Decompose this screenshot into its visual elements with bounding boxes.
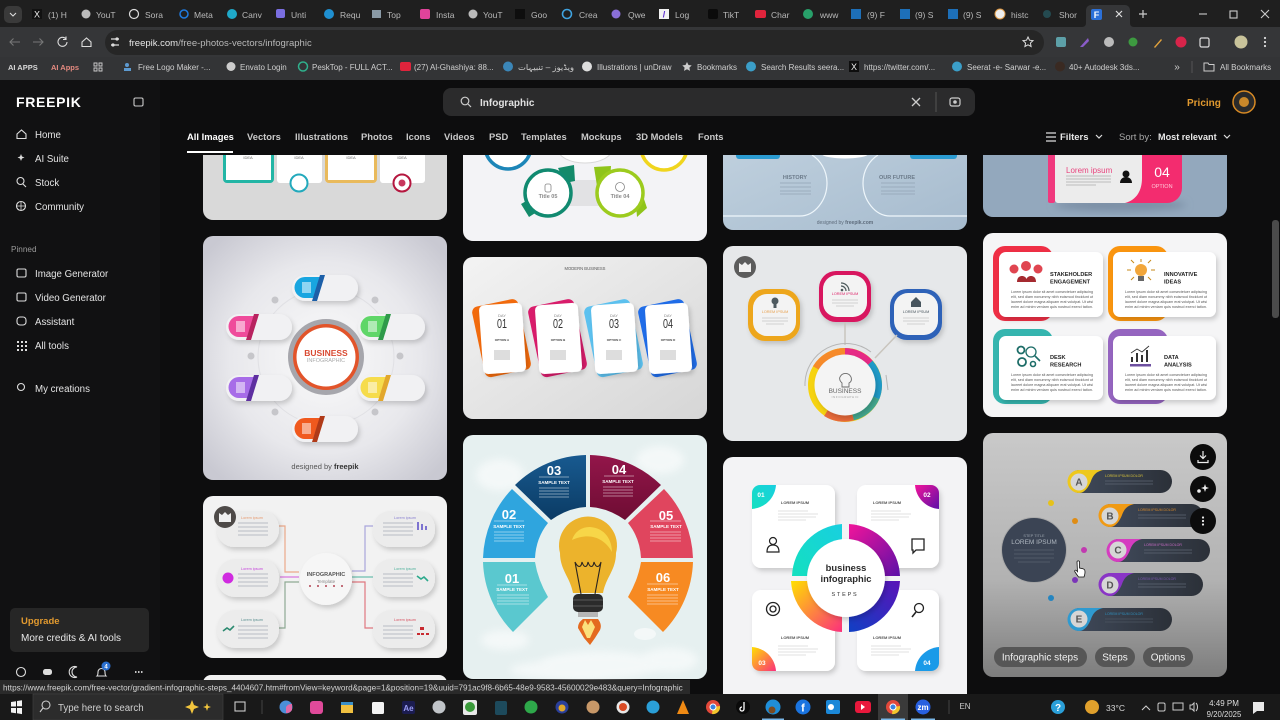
user avatar xyxy=(1233,91,1255,113)
category tabs: Icons xyxy=(406,131,430,142)
day card 01: OPTION A xyxy=(495,338,510,342)
card: modern business day cards xyxy=(463,257,707,419)
category tabs xyxy=(187,131,724,153)
topic: data analysis: ANALYSIS xyxy=(1164,362,1192,368)
center node: INFOGRAPHIC xyxy=(307,572,345,578)
tab strip: Insta xyxy=(436,10,455,20)
clouds xyxy=(476,446,698,679)
callout: blue: LOREM IPSUM xyxy=(903,310,929,314)
address bar xyxy=(105,30,1044,55)
menu: pinned tools: Video Generator xyxy=(35,293,107,304)
menu: main links: Community xyxy=(35,202,84,213)
tag: steps xyxy=(1095,647,1135,667)
active tab xyxy=(1082,5,1134,27)
center badge: BUSINESS xyxy=(304,348,348,358)
upgrade panel: Upgrade xyxy=(21,616,60,627)
category tabs: Mockups xyxy=(581,131,622,142)
tab strip: / xyxy=(663,10,666,20)
topic: desk research: laoreet dolore magna aliquam erat volutpat. Ut wisi xyxy=(1011,383,1093,387)
bookmarks bar: PeskTop - FULL ACT... xyxy=(312,63,393,72)
tag: infographic steps xyxy=(994,647,1087,667)
bookmarks bar xyxy=(0,57,1280,80)
category tabs: Photos xyxy=(361,131,393,142)
segment 01: SAMPLE TEXT xyxy=(496,587,528,592)
windows taskbar xyxy=(0,694,1280,720)
tab strip: Requ xyxy=(340,10,361,20)
clock xyxy=(1207,699,1242,719)
segment 03: 03 xyxy=(547,463,561,478)
pill: purple xyxy=(226,375,292,401)
category tabs: Fonts xyxy=(698,131,724,142)
pill: blue xyxy=(292,275,358,301)
center node: Template xyxy=(317,579,336,584)
topic: stakeholder engagement: enim ad minim veniam quis nostrud exerci tation. xyxy=(1011,305,1093,309)
tag: infographic steps: Infographic steps xyxy=(1002,652,1078,664)
pill: bottom right xyxy=(373,610,435,648)
business circle: I N F O G R A P H I C xyxy=(832,395,858,399)
tag: options: Options xyxy=(1151,652,1185,664)
tab strip: TikT xyxy=(723,10,739,20)
card: history and future (cropped): OUR FUTURE xyxy=(879,175,915,181)
topic: stakeholder engagement: elit, sed diam nonummy nibh euismod tincidunt ut xyxy=(1011,295,1093,299)
topic: stakeholder engagement: Lorem ipsum dolor sit amet consectetuer adipiscing xyxy=(1011,290,1093,294)
topic: desk research: Lorem ipsum dolor sit amet consectetuer adipiscing xyxy=(1011,373,1093,377)
tab strip: Qwe xyxy=(628,10,646,20)
upgrade panel: More credits & AI tools xyxy=(21,633,121,644)
menu: pinned tools: Image Generator xyxy=(35,269,109,280)
tab strip: (9) S xyxy=(915,10,934,20)
link status bar: https://www.freepik.com/free-vector/gradient-infographic-steps_4404607.htm#fromView=keyword&page=1&position=19&uuid=791ac9f8-6b65-48e9-9583-45600029e483&query=Infographic xyxy=(3,684,683,692)
icon: start button xyxy=(11,700,22,714)
segment 05: 05 xyxy=(659,508,673,523)
bookmarks bar: Free Logo Maker -... xyxy=(138,63,210,72)
segment 06: SAMPLE TEXT xyxy=(647,587,679,592)
footer icons xyxy=(16,662,142,677)
day card 01: 01 xyxy=(497,316,507,331)
icon: notifications xyxy=(1253,702,1264,714)
step bar A xyxy=(1068,470,1172,493)
taskbar search box: Type here to search xyxy=(58,703,144,714)
tab strip: www xyxy=(819,10,839,20)
day card 02: DAY xyxy=(554,313,562,318)
card: lorem ipsum option 04 (cropped): OPTION xyxy=(1151,184,1173,190)
topic: desk research: enim ad minim veniam quis nostrud exerci tation. xyxy=(1011,388,1093,392)
results scrollbar xyxy=(1272,220,1279,318)
segment 03: SAMPLE TEXT xyxy=(538,480,570,485)
column 2 image cards xyxy=(463,120,707,679)
bookmarks bar: » xyxy=(1174,62,1180,73)
segment 04: SAMPLE TEXT xyxy=(602,479,634,484)
tab strip: Char xyxy=(771,10,790,20)
browser chrome xyxy=(0,0,1280,80)
topic: desk research: elit, sed diam nonummy nibh euismod tincidunt ut xyxy=(1011,378,1093,382)
footer icons: 4 xyxy=(104,664,108,670)
segment 02 xyxy=(483,489,548,558)
app icons: f xyxy=(801,702,805,714)
category tabs: 3D Models xyxy=(636,131,683,142)
bookmarks bar: ویڈیوز – تنبیہات xyxy=(518,63,574,72)
center ring: business xyxy=(826,562,866,573)
center ring: STEPS xyxy=(831,592,859,598)
card: business infographic hexagon pills: designed by freepik xyxy=(291,462,359,471)
segment 06: 06 xyxy=(656,570,670,585)
step bar D: D xyxy=(1106,580,1114,592)
topic: data analysis: laoreet dolore magna aliquam erat volutpat. Ut wisi xyxy=(1125,383,1207,387)
topic: data analysis: elit, sed diam nonummy nibh euismod tincidunt ut xyxy=(1125,378,1207,382)
step card 03: LOREM IPSUM xyxy=(781,635,810,640)
tab strip: (1) H xyxy=(48,10,67,20)
topic: stakeholder engagement: laoreet dolore magna aliquam erat volutpat. Ut wisi xyxy=(1011,300,1093,304)
topic: desk research: DESK xyxy=(1050,355,1066,361)
card: four business topics xyxy=(983,233,1227,417)
step card 02 xyxy=(857,485,939,568)
topic: innovative ideas: elit, sed diam nonummy nibh euismod tincidunt ut xyxy=(1125,295,1207,299)
step card 01: 01 xyxy=(757,492,765,499)
topic: innovative ideas: IDEAS xyxy=(1164,280,1181,286)
bookmarks bar: All Bookmarks xyxy=(1220,63,1271,72)
step card 03 xyxy=(752,590,835,671)
action button: more xyxy=(1190,508,1216,534)
segment 01 xyxy=(483,562,548,632)
filters and sort: Sort by: xyxy=(1119,132,1152,143)
menu: main links: Stock xyxy=(35,178,59,189)
bookmarks bar: Illustrations | unDraw xyxy=(597,63,672,72)
connector dots xyxy=(1048,500,1087,601)
bookmarks bar: X xyxy=(851,62,857,72)
card: business infographic four steps xyxy=(723,457,967,707)
pill: bottom left xyxy=(217,610,279,648)
system tray xyxy=(1051,700,1198,714)
Freepik logo: FREEPIK xyxy=(16,94,82,110)
step bar E: E xyxy=(1076,614,1083,626)
clock: 9/20/2025 xyxy=(1207,710,1242,719)
tab strip: Log xyxy=(675,10,689,20)
pill: bottom right: Lorem ipsum xyxy=(394,618,416,622)
action button: download xyxy=(1190,444,1216,470)
icon: hand cursor xyxy=(1075,561,1085,577)
tab strip: (9) S xyxy=(963,10,982,20)
day card 04: OPTION D xyxy=(661,338,676,342)
app icons xyxy=(235,694,949,720)
heading: pinned: Pinned xyxy=(11,245,37,254)
language indicator: EN xyxy=(959,702,971,711)
app icons: zm xyxy=(917,703,929,712)
category tabs: Videos xyxy=(444,131,475,142)
day card 01 xyxy=(471,298,532,378)
clock: 4:49 PM xyxy=(1209,699,1239,708)
topic: innovative ideas: Lorem ipsum dolor sit amet consectetuer adipiscing xyxy=(1125,290,1207,294)
card: idea boxes (cropped) xyxy=(203,130,447,220)
filters and sort xyxy=(1046,132,1230,143)
card: lorem ipsum option 04 (cropped) xyxy=(983,120,1227,217)
filters and sort: Filters xyxy=(1060,132,1089,143)
card: history and future (cropped) xyxy=(723,120,967,230)
tab strip: YouT xyxy=(483,10,503,20)
pricing link: Pricing xyxy=(1187,98,1221,109)
step card 01: LOREM IPSUM xyxy=(781,500,810,505)
menu: pinned tools: All tools xyxy=(35,341,69,352)
menu: main links: AI Suite xyxy=(35,154,69,165)
bookmarks bar: (27) Al-Ghashiya: 88... xyxy=(414,63,494,72)
pill: middle right xyxy=(373,559,435,597)
pill: top left xyxy=(217,511,279,547)
pill: bottom left: Lorem ipsum xyxy=(241,618,263,622)
step bar A: LOREM IPSUM DOLOR xyxy=(1105,474,1143,478)
day card 02 xyxy=(527,298,588,378)
topic: innovative ideas xyxy=(1108,246,1216,321)
segment 05 xyxy=(628,489,693,558)
step bar C: LOREM IPSUM DOLOR xyxy=(1144,543,1182,547)
card: history and future (cropped): designed by freepik.com xyxy=(817,220,874,226)
tab strip: Crea xyxy=(579,10,598,20)
menu: pinned tools: Assistant xyxy=(35,317,75,328)
card: title circles (cropped): Title 04 xyxy=(611,194,630,200)
card: lorem ipsum option 04 (cropped): 04 xyxy=(1154,164,1170,180)
center ring xyxy=(791,524,900,632)
segment 02: SAMPLE TEXT xyxy=(493,524,525,529)
system tray: ? xyxy=(1055,703,1061,714)
card: modern business day cards: MODERN BUSINESS xyxy=(565,266,606,271)
tab strip: histc xyxy=(1011,10,1029,20)
tag: steps: Steps xyxy=(1102,652,1128,664)
callout: crimson xyxy=(819,271,871,322)
pill: top right xyxy=(373,511,435,547)
day card 03: OPTION C xyxy=(607,338,622,342)
step bar B xyxy=(1098,504,1203,527)
column 1 image cards xyxy=(203,130,447,715)
icon: light bulb with rocket flame xyxy=(559,516,617,645)
category tabs: PSD xyxy=(489,131,509,142)
category tabs: Illustrations xyxy=(295,131,348,142)
step card 02: LOREM IPSUM xyxy=(873,500,902,505)
address bar: freepik.com/free-photos-vectors/infographic xyxy=(129,38,312,49)
callout: amber xyxy=(748,289,800,341)
center node xyxy=(300,553,352,605)
search box xyxy=(443,88,975,116)
card: business circle with three rounded callouts xyxy=(723,246,967,441)
topic: stakeholder engagement xyxy=(993,246,1103,321)
topic: data analysis: DATA xyxy=(1164,355,1179,361)
pill: top left: Lorem ipsum xyxy=(241,516,263,520)
tab strip: Goo xyxy=(531,10,547,20)
segment 03 xyxy=(515,455,586,520)
card: lorem ipsum option 04 (cropped): Lorem ipsum xyxy=(1066,166,1113,175)
step card 03: 03 xyxy=(758,660,766,667)
card: idea boxes (cropped): IDEA xyxy=(243,155,253,160)
active tab: F xyxy=(1094,10,1100,20)
bookmarks bar: Envato Login xyxy=(240,63,287,72)
card: next row (cropped) xyxy=(203,675,447,715)
card: idea boxes (cropped): IDEA xyxy=(346,155,356,160)
tab strip xyxy=(0,0,1280,27)
category tabs: Templates xyxy=(521,131,567,142)
premium badge xyxy=(734,256,756,278)
business circle: BUSINESS xyxy=(829,388,862,395)
card: business infographic hexagon pills xyxy=(203,236,447,480)
segment 06 xyxy=(628,562,693,632)
day card 01: DAY xyxy=(498,313,506,318)
step bar A: A xyxy=(1075,478,1083,488)
day card 04: 04 xyxy=(663,316,673,331)
action button: sparkle xyxy=(1190,476,1216,502)
menu: pinned tools: My creations xyxy=(35,384,90,395)
card: infographic template mind map xyxy=(203,496,447,658)
pill: yellow xyxy=(358,375,425,401)
day card 04: DAY xyxy=(664,313,672,318)
card: light bulb rocket fan xyxy=(463,435,707,679)
bookmarks bar: Bookmarks xyxy=(697,63,737,72)
card: hovered infographic steps xyxy=(983,433,1227,677)
system tray: 33°C xyxy=(1106,703,1125,713)
bookmarks bar: Search Results seera... xyxy=(761,63,844,72)
segment 01: 01 xyxy=(505,571,519,586)
step card 01 xyxy=(752,485,835,568)
step bar D: LOREM IPSUM DOLOR xyxy=(1138,577,1176,581)
site sidebar xyxy=(0,80,160,694)
pill: middle right: Lorem ipsum xyxy=(394,567,416,571)
card: idea boxes (cropped): IDEA xyxy=(397,155,407,160)
tab strip: X xyxy=(34,10,40,20)
dark lorem ipsum circle xyxy=(1001,517,1067,583)
dark lorem ipsum circle: LOREM IPSUM xyxy=(1011,539,1057,546)
pill: orange xyxy=(292,416,358,442)
menu: main links: Home xyxy=(35,130,61,141)
column 3 image cards xyxy=(723,120,967,707)
card: history and future (cropped): HISTORY xyxy=(783,175,807,181)
day card 03: 03 xyxy=(609,316,619,331)
bookmarks bar: AI APPS xyxy=(8,63,38,72)
category tabs: Vectors xyxy=(247,131,281,142)
tab strip: (9) F xyxy=(867,10,885,20)
bookmarks bar: Seerat -e- Sarwar -e... xyxy=(967,63,1046,72)
step card 04: 04 xyxy=(923,660,931,667)
icon: sidebar toggle xyxy=(134,98,143,106)
day card 02: 02 xyxy=(553,316,563,331)
card: title circles (cropped) xyxy=(463,120,707,241)
segment 04: 04 xyxy=(612,462,627,477)
topic: desk research xyxy=(993,329,1103,404)
day card 04 xyxy=(637,298,698,378)
center badge: INFOGRAPHIC xyxy=(307,358,345,364)
step bar E xyxy=(1068,608,1172,631)
menu: pinned tools xyxy=(17,269,109,395)
pill: middle left: Lorem ipsum xyxy=(241,567,263,571)
extension icons xyxy=(1056,36,1266,48)
premium badge xyxy=(214,506,236,528)
bookmarks bar: https://twitter.com/... xyxy=(864,63,935,72)
tab strip: Unti xyxy=(291,10,306,20)
day card 03: DAY xyxy=(610,313,618,318)
day card 03 xyxy=(583,298,644,378)
upgrade panel xyxy=(10,608,149,652)
bookmarks bar: 40+ Autodesk 3ds... xyxy=(1069,63,1140,72)
pill: green xyxy=(358,314,425,340)
app icons: Ae xyxy=(403,704,414,713)
tab strip: YouT xyxy=(96,10,116,20)
dark lorem ipsum circle: STEP TITLE xyxy=(1023,534,1045,538)
tab strip: Sora xyxy=(145,10,163,20)
segment 04 xyxy=(590,455,661,520)
center badge xyxy=(288,319,364,395)
topic: data analysis: enim ad minim veniam quis nostrud exerci tation. xyxy=(1125,388,1207,392)
topic: data analysis xyxy=(1108,329,1216,404)
card: idea boxes (cropped): IDEA xyxy=(294,155,304,160)
menu: main links xyxy=(16,130,84,213)
filters and sort: Most relevant xyxy=(1158,132,1217,142)
link status bar xyxy=(0,680,690,694)
callout: amber: LOREM IPSUM xyxy=(762,310,788,314)
topic: data analysis: Lorem ipsum dolor sit amet consectetuer adipiscing xyxy=(1125,373,1207,377)
step card 02: 02 xyxy=(923,492,931,499)
card: title circles (cropped): Title 05 xyxy=(539,194,557,200)
step bar C xyxy=(1106,539,1210,562)
tab strip: Shor xyxy=(1059,10,1077,20)
topic: innovative ideas: enim ad minim veniam quis nostrud exerci tation. xyxy=(1125,305,1207,309)
window controls xyxy=(1139,10,1269,18)
pill: top right: Lorem ipsum xyxy=(394,516,416,520)
tag: options xyxy=(1143,647,1193,667)
pill: pink xyxy=(226,314,292,340)
step card 04 xyxy=(857,590,939,671)
pill: middle left xyxy=(217,559,279,597)
topic: desk research: RESEARCH xyxy=(1050,362,1081,368)
address toolbar xyxy=(0,27,1280,57)
center ring: infographic xyxy=(820,573,872,584)
column 4 image cards xyxy=(983,120,1227,677)
step bar B: LOREM IPSUM DOLOR xyxy=(1138,508,1176,512)
segment 02: 02 xyxy=(502,507,516,522)
day card 02: OPTION B xyxy=(551,338,566,342)
topic: innovative ideas: INNOVATIVE xyxy=(1164,272,1198,278)
topic: stakeholder engagement: STAKEHOLDER xyxy=(1050,272,1092,278)
taskbar search box xyxy=(33,694,223,720)
segment 05: SAMPLE TEXT xyxy=(650,524,682,529)
callout: blue xyxy=(890,289,942,340)
callout: crimson: LOREM IPSUM xyxy=(832,292,858,296)
category tabs: All Images xyxy=(187,131,234,142)
step bar D xyxy=(1098,573,1203,596)
topic: stakeholder engagement: ENGAGEMENT xyxy=(1050,280,1091,286)
tab strip: Meta xyxy=(194,10,213,20)
bookmarks bar: AI Apps xyxy=(51,63,79,72)
step bar C: C xyxy=(1114,546,1122,556)
step bar E: LOREM IPSUM DOLOR xyxy=(1105,612,1143,616)
topic: innovative ideas: laoreet dolore magna aliquam erat volutpat. Ut wisi xyxy=(1125,300,1207,304)
site header band xyxy=(160,80,1280,155)
business circle xyxy=(812,351,879,418)
step bar B: B xyxy=(1106,512,1114,522)
tab strip: Canv xyxy=(242,10,263,20)
tab strip: Top xyxy=(387,10,401,20)
search box: Infographic xyxy=(480,98,535,109)
step card 04: LOREM IPSUM xyxy=(873,635,902,640)
